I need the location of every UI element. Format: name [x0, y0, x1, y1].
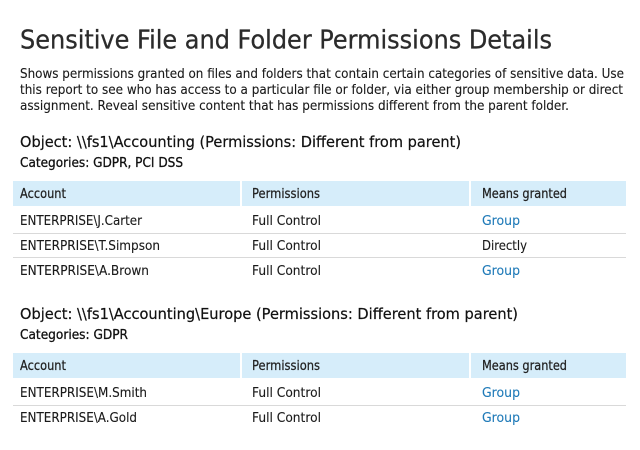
table: accounting permissions: Group — [482, 263, 520, 279]
table: accounting permissions: ENTERPRISE\J.Carter — [20, 213, 142, 229]
table: europe permissions — [13, 353, 626, 426]
table: accounting permissions: Account — [20, 187, 66, 202]
panel: europe object — [13, 305, 626, 426]
object heading: Object: \\fs1\Accounting (Permissions: Different from parent) — [20, 133, 461, 151]
table: europe permissions: Account — [20, 359, 66, 374]
table: accounting permissions: Directly — [482, 238, 527, 254]
table: europe permissions: ENTERPRISE\A.Gold — [20, 410, 137, 426]
table: europe permissions: Full Control — [252, 385, 321, 401]
panel: accounting object — [13, 133, 626, 279]
table: europe permissions: ENTERPRISE\M.Smith — [20, 385, 147, 401]
table: europe permissions: Group — [482, 385, 520, 401]
table: accounting permissions: Means granted — [482, 187, 567, 202]
table: europe permissions: Permissions — [252, 359, 320, 374]
table: europe permissions: Means granted — [482, 359, 567, 374]
table: accounting permissions: Full Control — [252, 263, 321, 279]
table: accounting permissions: Full Control — [252, 213, 321, 229]
table: accounting permissions: Permissions — [252, 187, 320, 202]
table: accounting permissions: Group — [482, 213, 520, 229]
intro text block: assignment. Reveal sensitive content that has permissions different from the parent folder. — [20, 98, 569, 114]
table: accounting permissions: Full Control — [252, 238, 321, 254]
categories label: Categories: GDPR — [20, 328, 128, 343]
categories label: Categories: GDPR, PCI DSS — [20, 156, 183, 171]
title: Sensitive File and Folder Permissions Details — [20, 26, 552, 56]
table: europe permissions: Group — [482, 410, 520, 426]
object heading: Object: \\fs1\Accounting\Europe (Permissions: Different from parent) — [20, 305, 518, 323]
intro text block — [20, 66, 624, 114]
table: accounting permissions — [13, 181, 626, 279]
table: accounting permissions: ENTERPRISE\T.Simpson — [20, 238, 160, 254]
table: europe permissions: Full Control — [252, 410, 321, 426]
table: accounting permissions: ENTERPRISE\A.Brown — [20, 263, 149, 279]
